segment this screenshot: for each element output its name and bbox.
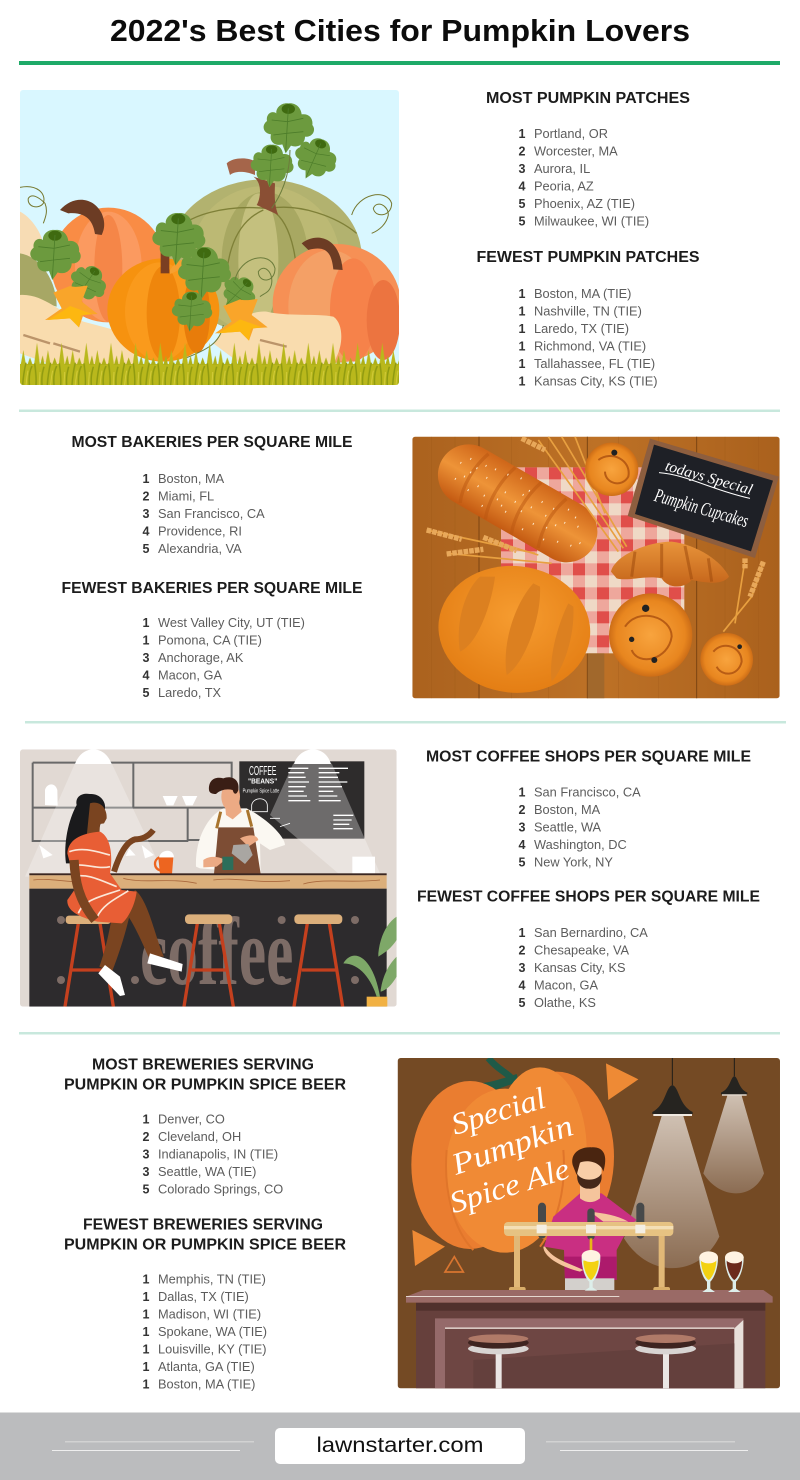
- list: fewest breweries: 1: [143, 1325, 150, 1339]
- list: fewest pumpkin patches: [519, 286, 658, 388]
- list: most pumpkin patches: Portland, OR: [534, 126, 608, 141]
- list: fewest coffee shops: 5: [519, 996, 526, 1010]
- list: fewest breweries: 1: [143, 1360, 150, 1374]
- list: most bakeries: Boston, MA: [158, 471, 225, 486]
- list: fewest breweries: Memphis, TN (TIE): [158, 1272, 266, 1286]
- list: most coffee shops: 4: [519, 838, 526, 852]
- list: fewest bakeries: 1: [143, 616, 150, 630]
- list: most coffee shops: Seattle, WA: [534, 820, 602, 834]
- list: fewest bakeries: Anchorage, AK: [158, 650, 244, 665]
- list: fewest breweries: Boston, MA (TIE): [158, 1376, 255, 1392]
- list: fewest pumpkin patches: Nashville, TN (TIE): [534, 304, 642, 318]
- left orange pumpkin: [51, 200, 166, 322]
- chalkboard sign: Pumpkin Cupcakes: [651, 485, 751, 532]
- menu board: Pumpkin Spice Latte: [243, 789, 279, 795]
- list: most coffee shops: San Francisco, CA: [534, 784, 641, 800]
- list: fewest bakeries: Macon, GA: [158, 668, 222, 682]
- list: most pumpkin patches: 3: [519, 162, 526, 176]
- list: most pumpkin patches: Worcester, MA: [534, 144, 618, 158]
- pumpkin sign lettering: Special: [447, 1081, 549, 1142]
- list: fewest breweries: [143, 1272, 267, 1392]
- list: most pumpkin patches: 2: [519, 144, 526, 158]
- list: fewest coffee shops: Olathe, KS: [534, 995, 596, 1010]
- list: most pumpkin patches: 4: [519, 180, 526, 194]
- heading: most bakeries: MOST BAKERIES PER SQUARE MILE: [72, 434, 353, 451]
- list: fewest coffee shops: 4: [519, 978, 526, 992]
- list: most pumpkin patches: 1: [519, 127, 526, 141]
- list: fewest bakeries: Laredo, TX: [158, 685, 222, 700]
- list: fewest breweries: 1: [143, 1342, 150, 1356]
- list: most breweries: 1: [143, 1112, 150, 1126]
- list: most breweries: 3: [143, 1165, 150, 1179]
- list: most breweries: 2: [143, 1130, 150, 1144]
- large round loaf: [438, 566, 590, 693]
- list: fewest pumpkin patches: Laredo, TX (TIE): [534, 321, 629, 336]
- list: fewest breweries: Madison, WI (TIE): [158, 1306, 261, 1322]
- list: fewest pumpkin patches: 1: [519, 287, 526, 301]
- rolls: [585, 443, 753, 686]
- list: most bakeries: 2: [143, 490, 150, 504]
- heading: fewest pumpkin patches: FEWEST PUMPKIN PATCHES: [476, 249, 700, 266]
- front orange pumpkin: [107, 240, 219, 362]
- list: fewest breweries: 1: [143, 1378, 150, 1392]
- menu board: [239, 761, 364, 839]
- list: most coffee shops: 2: [519, 803, 526, 817]
- list: most coffee shops: 3: [519, 820, 526, 834]
- list: fewest pumpkin patches: Kansas City, KS (TIE): [534, 374, 658, 388]
- chalkboard sign: todays Special: [663, 458, 754, 499]
- panel: most and fewest coffee shops: [417, 748, 760, 1010]
- list: fewest bakeries: West Valley City, UT (TIE): [158, 615, 305, 630]
- heading: most coffee shops: MOST COFFEE SHOPS PER SQUARE MILE: [426, 748, 751, 766]
- list: most breweries: Colorado Springs, CO: [158, 1182, 283, 1196]
- title: 2022's Best Cities for Pumpkin Lovers: [110, 13, 690, 48]
- list: most coffee shops: New York, NY: [534, 854, 613, 870]
- wheat stalks: [427, 437, 763, 632]
- list: fewest breweries: Dallas, TX (TIE): [158, 1289, 249, 1304]
- list: fewest bakeries: Pomona, CA (TIE): [158, 632, 262, 648]
- list: fewest breweries: 1: [143, 1308, 150, 1322]
- panel: most and fewest pumpkin patches: [476, 90, 700, 388]
- panel: most and fewest breweries: [64, 1056, 346, 1392]
- shelves: [33, 763, 232, 841]
- right orange pumpkin: [273, 238, 401, 363]
- list: fewest pumpkin patches: 1: [519, 322, 526, 336]
- list: fewest breweries: 1: [143, 1290, 150, 1304]
- menu board: COFFEE: [249, 764, 276, 778]
- heading: fewest bakeries: FEWEST BAKERIES PER SQUARE MILE: [62, 580, 363, 597]
- panel: most and fewest bakeries: [62, 434, 363, 700]
- list: most coffee shops: Washington, DC: [534, 837, 627, 852]
- list: most breweries: Cleveland, OH: [158, 1129, 241, 1144]
- list: fewest pumpkin patches: 1: [519, 374, 526, 388]
- list: most breweries: Denver, CO: [158, 1112, 225, 1126]
- barista: [196, 777, 285, 874]
- long sesame loaf: [438, 444, 598, 562]
- list: most pumpkin patches: Phoenix, AZ (TIE): [534, 196, 635, 211]
- cream squash: [20, 294, 134, 364]
- list: fewest pumpkin patches: 1: [519, 304, 526, 318]
- list: fewest breweries: Atlanta, GA (TIE): [158, 1359, 255, 1374]
- list: fewest coffee shops: [519, 925, 648, 1010]
- list: fewest bakeries: 3: [143, 651, 150, 665]
- bar stools: [468, 1334, 696, 1388]
- list: most pumpkin patches: Peoria, AZ: [534, 178, 594, 194]
- list: most coffee shops: 5: [519, 856, 526, 870]
- list: most bakeries: 4: [143, 524, 150, 538]
- decorative triangles: [412, 1063, 638, 1272]
- list: fewest coffee shops: Chesapeake, VA: [534, 942, 630, 958]
- counter lettering: coffee: [140, 898, 293, 1005]
- beer glasses: [582, 1250, 744, 1292]
- list: most breweries: Indianapolis, IN (TIE): [158, 1146, 278, 1162]
- light beams and lamps: [25, 749, 380, 877]
- list: most bakeries: 3: [143, 507, 150, 521]
- list: fewest pumpkin patches: Boston, MA (TIE): [534, 286, 631, 301]
- heading: most breweries: [64, 1056, 346, 1094]
- list: most pumpkin patches: 5: [519, 197, 526, 211]
- list: most bakeries: [143, 471, 265, 556]
- white mugs and bottle: [39, 784, 197, 858]
- illustration: bread on wooden table: [412, 433, 780, 700]
- illustration: pumpkins in grass: [20, 90, 401, 385]
- heading: fewest breweries: PUMPKIN OR PUMPKIN SPICE BEER: [64, 1236, 346, 1254]
- woman at counter: [65, 794, 183, 996]
- list: fewest breweries: Spokane, WA (TIE): [158, 1324, 267, 1339]
- list: most pumpkin patches: 5: [519, 214, 526, 228]
- heading: most breweries: PUMPKIN OR PUMPKIN SPICE BEER: [64, 1076, 346, 1094]
- list: most breweries: 5: [143, 1182, 150, 1196]
- heading: fewest breweries: FEWEST BREWERIES SERVING: [83, 1216, 323, 1234]
- counter: [29, 873, 387, 1007]
- bar counter: [406, 1290, 773, 1388]
- list: most bakeries: San Francisco, CA: [158, 506, 265, 521]
- list: most bakeries: Miami, FL: [158, 488, 214, 504]
- list: fewest coffee shops: Kansas City, KS: [534, 960, 626, 975]
- list: fewest pumpkin patches: Tallahassee, FL (TIE): [534, 356, 655, 371]
- bartender: [543, 1147, 637, 1290]
- footer url: lawnstarter.com: [316, 1434, 484, 1457]
- list: fewest coffee shops: 1: [519, 926, 526, 940]
- list: fewest bakeries: 1: [143, 634, 150, 648]
- list: fewest bakeries: [143, 615, 305, 700]
- plant: [343, 917, 397, 1007]
- list: most coffee shops: Boston, MA: [534, 802, 601, 817]
- list: most pumpkin patches: [519, 126, 649, 228]
- menu board: "BEANS": [248, 776, 278, 785]
- footer: [0, 1412, 800, 1480]
- heading: most breweries: MOST BREWERIES SERVING: [92, 1056, 314, 1074]
- list: fewest breweries: 1: [143, 1272, 150, 1286]
- list: most bakeries: Providence, RI: [158, 524, 242, 538]
- flowers: [45, 286, 268, 341]
- list: fewest coffee shops: San Bernardino, CA: [534, 925, 648, 940]
- wall pumpkin: [411, 1058, 614, 1253]
- illustration: pumpkin ale bar: [398, 1058, 780, 1388]
- list: most breweries: [143, 1112, 283, 1196]
- back green pumpkin: [168, 158, 362, 334]
- leaves: [30, 103, 343, 332]
- chalkboard sign: [628, 439, 779, 558]
- list: fewest pumpkin patches: 1: [519, 340, 526, 354]
- list: fewest pumpkin patches: Richmond, VA (TIE): [534, 338, 646, 354]
- pumpkin sign lettering: Spice Ale: [445, 1151, 573, 1220]
- pumpkin sign lettering: Pumpkin: [446, 1108, 577, 1182]
- list: fewest coffee shops: Macon, GA: [534, 978, 598, 992]
- hanging lamps: [624, 1058, 764, 1268]
- list: most breweries: 3: [143, 1148, 150, 1162]
- illustration: coffee shop: [20, 749, 397, 1007]
- orange mug: [155, 851, 174, 874]
- heading: fewest breweries: [64, 1216, 346, 1254]
- counter lettering: [57, 916, 359, 985]
- grass: [20, 340, 399, 385]
- pumpkin sign lettering: [452, 1086, 574, 1216]
- list: fewest breweries: Louisville, KY (TIE): [158, 1342, 267, 1356]
- beer tap: [504, 1203, 673, 1292]
- list: most breweries: Seattle, WA (TIE): [158, 1164, 256, 1179]
- list: fewest coffee shops: 3: [519, 961, 526, 975]
- list: most bakeries: Alexandria, VA: [158, 541, 242, 556]
- heading: fewest coffee shops: FEWEST COFFEE SHOPS PER SQUARE MILE: [417, 888, 760, 906]
- stools: [65, 914, 343, 1007]
- list: most coffee shops: 1: [519, 786, 526, 800]
- list: most bakeries: 5: [143, 542, 150, 556]
- list: fewest coffee shops: 2: [519, 944, 526, 958]
- list: most bakeries: 1: [143, 472, 150, 486]
- list: fewest pumpkin patches: 1: [519, 357, 526, 371]
- list: fewest bakeries: 4: [143, 668, 150, 682]
- list: fewest bakeries: 5: [143, 686, 150, 700]
- croissant: [611, 542, 729, 586]
- list: most pumpkin patches: Aurora, IL: [534, 161, 590, 176]
- list: most pumpkin patches: Milwaukee, WI (TIE): [534, 214, 649, 228]
- list: most coffee shops: [519, 784, 641, 870]
- heading: most pumpkin patches: MOST PUMPKIN PATCHES: [486, 90, 690, 107]
